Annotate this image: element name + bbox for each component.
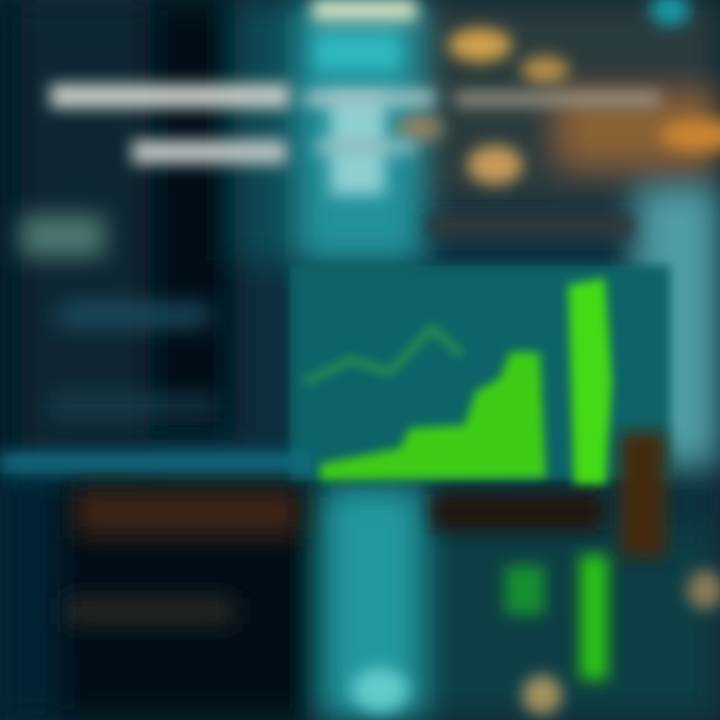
left column text block	[20, 215, 220, 414]
brown post	[620, 432, 666, 557]
teal horizontal line	[0, 452, 310, 474]
subtitle bar	[428, 214, 633, 238]
small line chart in panel	[305, 328, 462, 382]
orange bokeh lights	[352, 0, 720, 715]
left brown block	[65, 488, 300, 624]
dark brown ledge	[432, 494, 602, 530]
chart base area	[320, 352, 546, 480]
green bar chart	[320, 278, 612, 485]
title: blurred headline	[50, 84, 660, 164]
teal chart panel	[290, 265, 670, 480]
green reflection	[505, 555, 608, 680]
top light glow	[312, 0, 417, 195]
tall green spike	[568, 278, 612, 485]
